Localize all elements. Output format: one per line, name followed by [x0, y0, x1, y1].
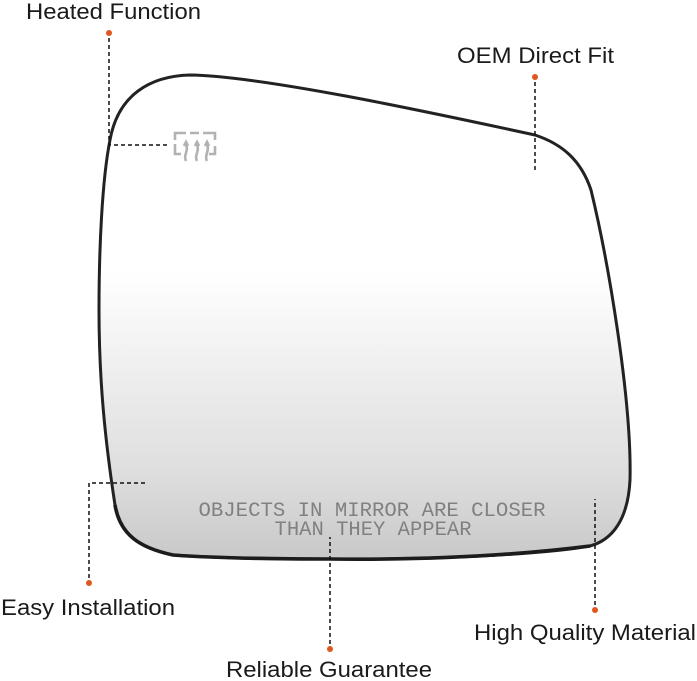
callout: easy installation — [1, 483, 175, 620]
callout: OEM direct fit: OEM Direct Fit — [457, 43, 614, 68]
mirror bottom edge — [115, 505, 590, 559]
mirror warning text — [198, 500, 546, 542]
callout: OEM direct fit — [457, 43, 614, 170]
mirror glass — [99, 75, 630, 559]
mirror warning text: THAN THEY APPEAR — [274, 519, 472, 542]
icon: heated defrost symbol — [175, 133, 215, 161]
callout: high quality material: High Quality Material — [474, 620, 696, 645]
callout: easy installation: Easy Installation — [1, 595, 175, 620]
callout: heated function — [26, 0, 201, 145]
callout: reliable guarantee — [226, 537, 432, 681]
mirror warning text: OBJECTS IN MIRROR ARE CLOSER — [198, 500, 546, 523]
callout: high quality material — [474, 499, 696, 645]
